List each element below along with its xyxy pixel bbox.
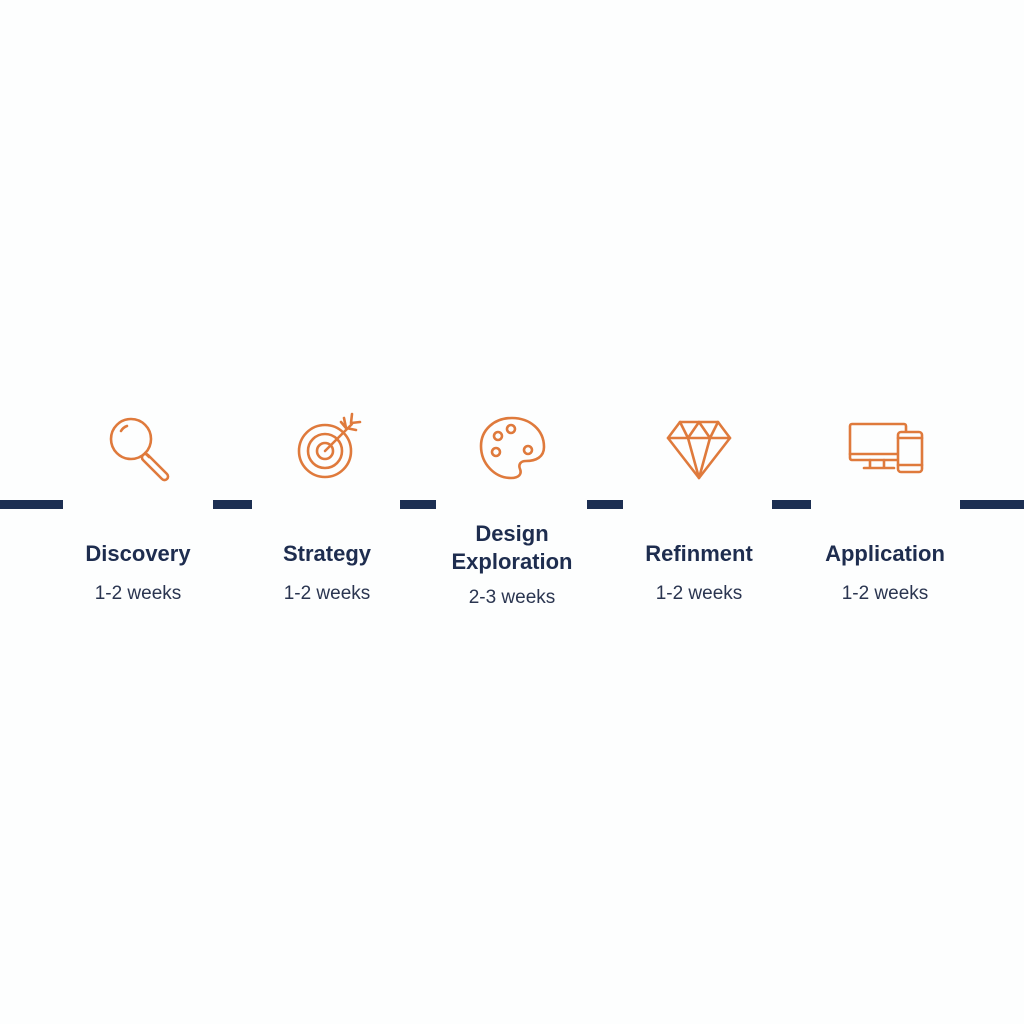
step: Discovery: 1-2 weeks [95,583,181,604]
step: Application: Application [825,541,945,566]
timeline dashes [0,500,1024,509]
step: Application: 1-2 weeks [842,583,928,604]
icon: diamond [666,420,732,480]
step: Discovery [85,541,191,604]
step: Refinement: 1-2 weeks [656,583,742,604]
step: Design Exploration: 2-3 weeks [469,587,555,608]
step: Application [825,541,945,604]
step: Strategy: 1-2 weeks [284,583,370,604]
step: Discovery: Discovery [85,541,191,566]
step: Design Exploration: Design [475,521,549,546]
step: Design Exploration: Exploration [451,549,572,574]
step: Refinement [645,541,753,604]
icon: palette [480,416,546,480]
icon: devices [848,422,924,474]
icon: target [298,412,362,478]
step: Strategy [283,541,371,604]
step: Strategy: Strategy [283,541,371,566]
step: Refinement: Refinment [645,541,753,566]
step: Design Exploration [451,521,572,608]
icon: magnifier [110,418,170,482]
